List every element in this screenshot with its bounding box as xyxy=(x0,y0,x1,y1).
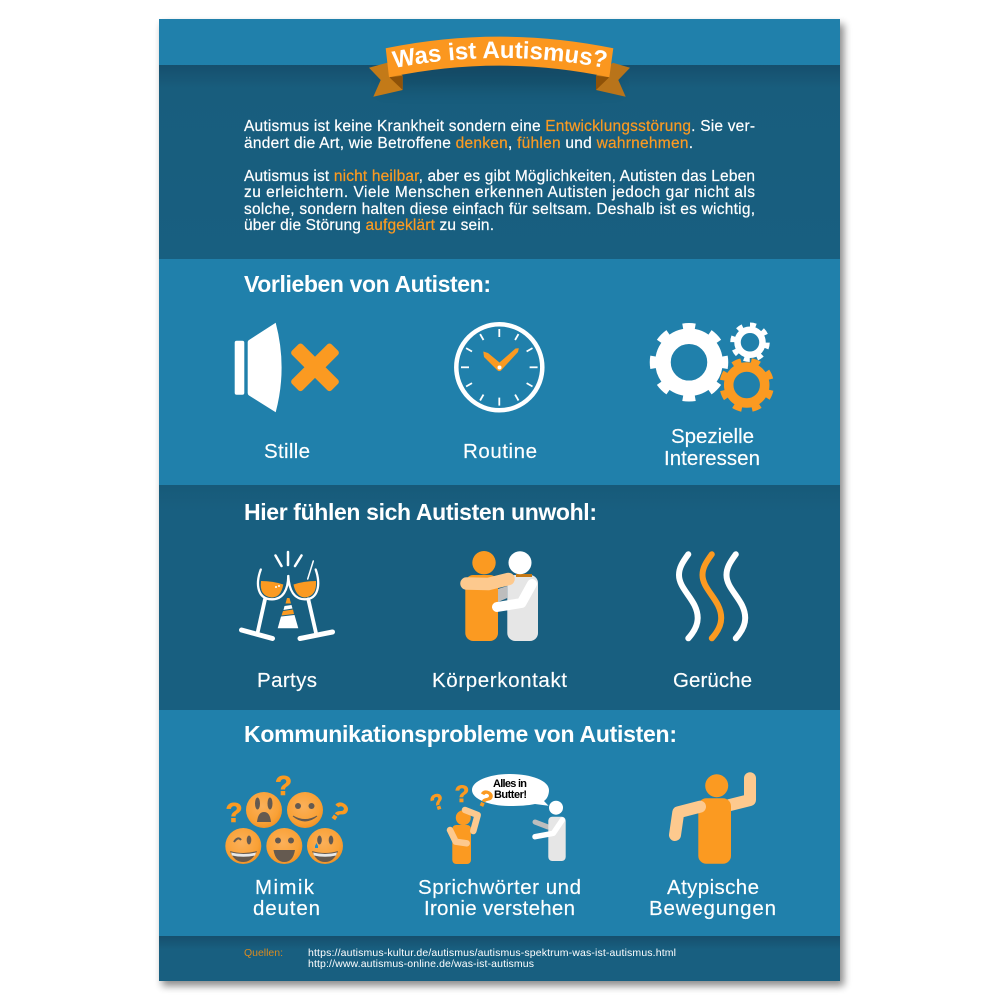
ribbon left tail xyxy=(369,63,403,97)
question marks: ? xyxy=(427,788,448,816)
icon: smell waves xyxy=(679,554,745,638)
intro text: solche, sondern halten diese einfach für seltsam. Deshalb ist es wichtig, xyxy=(244,201,755,218)
sources links xyxy=(308,947,676,970)
sources links: http://www.autismus-online.de/was-ist-autismus xyxy=(308,958,534,970)
label xyxy=(418,876,581,920)
intro text: Autismus ist nicht heilbar, aber es gibt Möglichkeiten, Autisten das Leben xyxy=(244,168,755,185)
label: Bewegungen xyxy=(649,897,776,920)
label: Atypische xyxy=(667,876,759,899)
icon: clock xyxy=(456,324,542,410)
label: Sprichwörter und xyxy=(418,876,581,899)
label: Partys xyxy=(257,669,317,692)
label xyxy=(253,876,320,920)
intro text: zu erleichtern. Viele Menschen erkennen Autisten jedoch gar nicht als xyxy=(244,184,755,201)
sources label: Quellen: xyxy=(244,947,283,959)
panel: Kommunikationsprobleme xyxy=(159,710,840,936)
label xyxy=(664,425,760,470)
panel: sources xyxy=(159,936,840,981)
question marks: ? xyxy=(324,795,354,828)
question marks xyxy=(427,781,497,816)
intro text: Autismus ist keine Krankheit sondern eine Entwicklungsstörung. Sie ver- xyxy=(244,118,755,135)
ribbon band xyxy=(386,37,613,77)
label: Routine xyxy=(463,440,537,463)
panel: Vorlieben xyxy=(159,259,840,485)
heading: Hier fühlen sich Autisten unwohl: xyxy=(244,499,597,525)
question marks: ? xyxy=(455,781,469,808)
speech bubble xyxy=(472,774,549,806)
sources links: https://autismus-kultur.de/autismus/autismus-spektrum-was-ist-autismus.html xyxy=(308,947,676,959)
panel: unwohl xyxy=(159,485,840,710)
label: Stille xyxy=(264,440,310,463)
intro text xyxy=(244,118,755,234)
icon: party glasses xyxy=(242,552,332,638)
icon: speech confusion xyxy=(427,774,566,864)
label: deuten xyxy=(253,897,320,920)
title ribbon xyxy=(369,36,630,97)
title: Was ist Autismus? xyxy=(391,41,607,68)
label: Mimik xyxy=(255,876,315,899)
label: Interessen xyxy=(664,447,760,470)
icon: faces xyxy=(225,770,354,864)
speech bubble: Butter! xyxy=(494,789,527,801)
page shadow xyxy=(162,24,844,986)
question marks: ? xyxy=(474,784,497,814)
intro text: über die Störung aufgeklärt zu sein. xyxy=(244,217,494,234)
icon: person atypical movement xyxy=(675,774,750,864)
icon: gears xyxy=(654,325,771,410)
question marks: ? xyxy=(275,770,292,801)
label: Gerüche xyxy=(673,669,752,692)
label: Spezielle xyxy=(671,425,754,448)
panel: top band xyxy=(159,19,840,65)
question marks xyxy=(225,770,354,828)
icon: hug xyxy=(465,551,538,641)
heading: Vorlieben von Autisten: xyxy=(244,271,491,297)
label xyxy=(649,876,776,920)
ribbon right tail xyxy=(596,63,630,97)
intro text: ändert die Art, wie Betroffene denken, fühlen und wahrnehmen. xyxy=(244,135,693,152)
panel: intro xyxy=(159,65,840,259)
label: Ironie verstehen xyxy=(424,897,575,920)
icon: speaker muted xyxy=(235,323,340,412)
question marks: ? xyxy=(225,797,243,828)
label: Körperkontakt xyxy=(432,669,567,692)
speech bubble: Alles in xyxy=(493,778,527,790)
heading: Kommunikationsprobleme von Autisten: xyxy=(244,721,677,747)
